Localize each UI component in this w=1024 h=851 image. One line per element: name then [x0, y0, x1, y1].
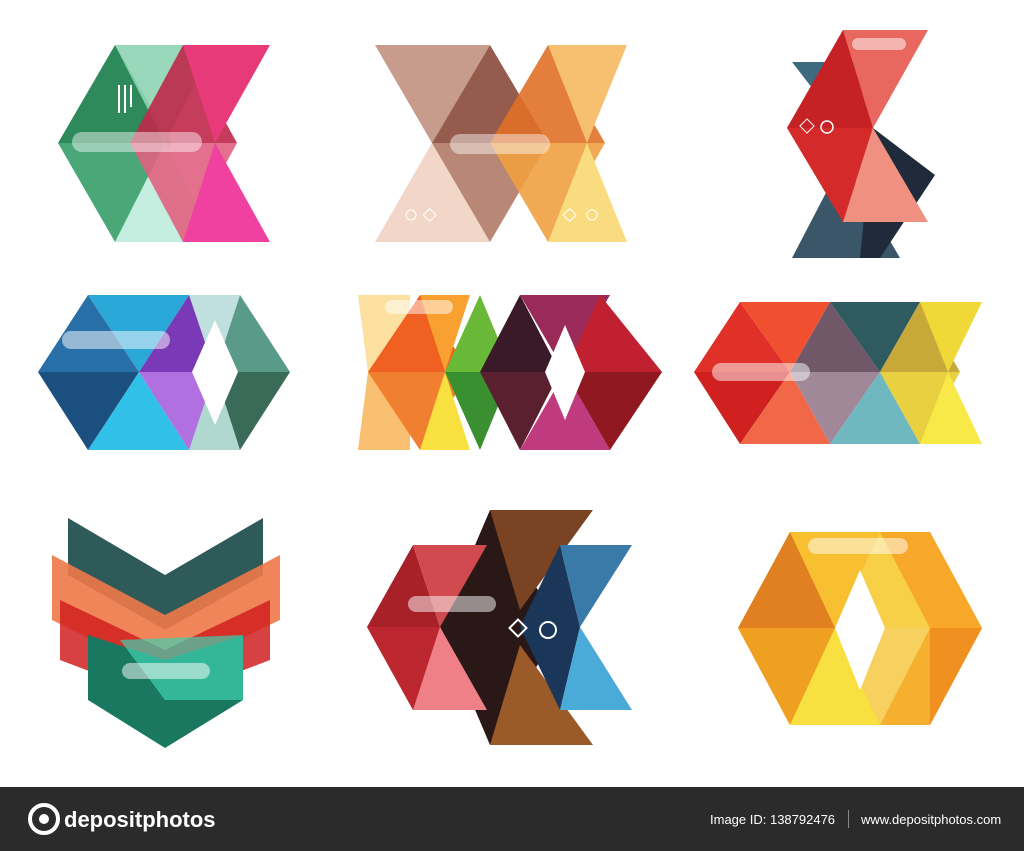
shape 1: green-pink arrow	[58, 45, 270, 242]
shape 2: brown-orange bowtie	[375, 45, 627, 242]
footer logo: depositphotos	[64, 807, 216, 832]
footer image id: Image ID: 138792476	[710, 812, 835, 827]
shape 3: red vertical	[787, 30, 935, 258]
shape 4: blue-purple hexagon	[38, 295, 290, 450]
shape 5: orange-green-maroon	[358, 295, 662, 450]
footer url: www.depositphotos.com	[860, 812, 1001, 827]
shape 9: orange hexagon	[738, 532, 982, 725]
shape 7: teal-orange chevrons	[52, 518, 280, 748]
shape 8: brown-blue arrow	[367, 510, 632, 745]
footer bar	[0, 787, 1024, 851]
shape 6: red-teal-yellow arrow	[694, 302, 982, 444]
